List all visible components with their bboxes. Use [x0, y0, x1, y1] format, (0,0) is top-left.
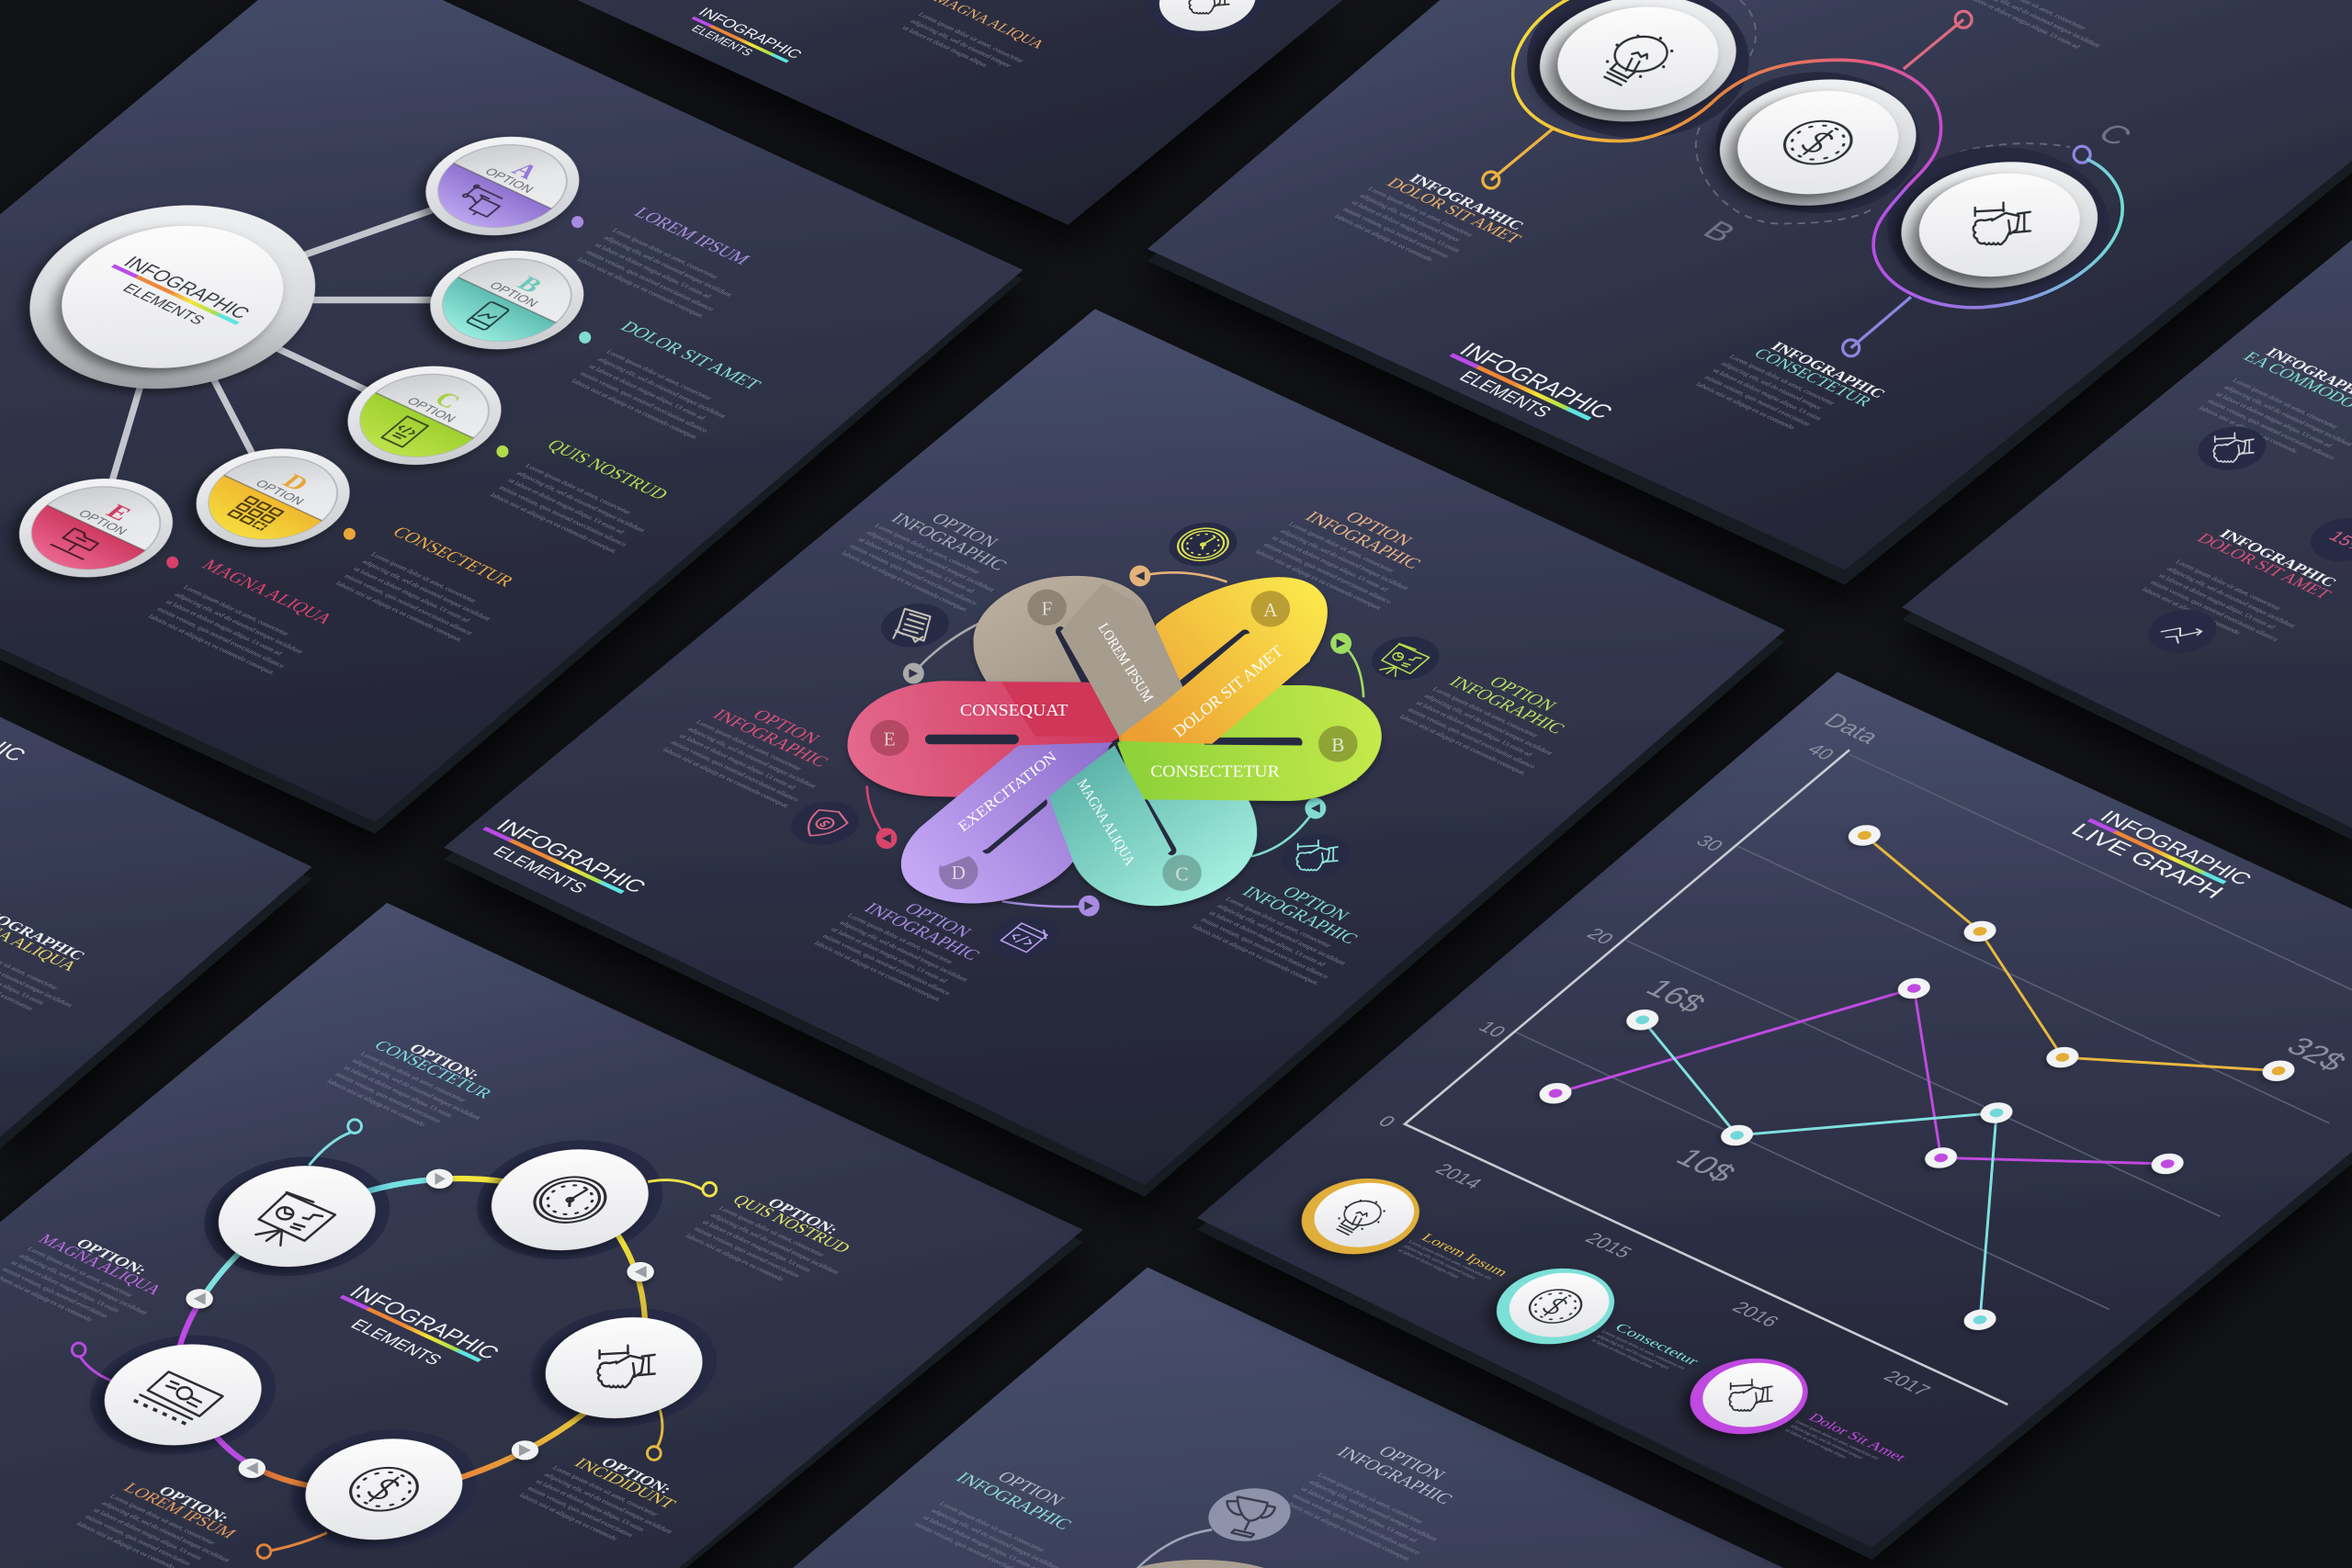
legend text: dolor sit amet: Lorem ipsum dolor sit amet, consectetur elit — [1793, 1419, 1880, 1461]
bands — [920, 583, 1358, 897]
panel: S-curve process — [1148, 0, 2352, 585]
panel: left mid sheet — [0, 682, 312, 1149]
node D: OPTION — [253, 477, 308, 507]
lorem block: ut labore et dolore magna aliqua. Ut enim ad — [2214, 390, 2335, 449]
block top right: OPTION — [1340, 509, 1417, 549]
block: magna aliqua — [0, 1224, 185, 1337]
icon: hands — [2184, 418, 2279, 479]
block: dolor sit amet — [1333, 163, 1536, 281]
petal F beige — [974, 576, 1183, 738]
chart title — [2065, 803, 2257, 907]
connector arcs — [867, 572, 1363, 907]
block bottom left: INFOGRAPHIC — [860, 900, 984, 964]
icon: hands — [1268, 826, 1363, 886]
band labels — [955, 620, 1286, 868]
block top right: laboris nisi ut aliquip ex ea commodo consequat. — [1253, 548, 1385, 612]
text B: minim veniam, quis nostrud exercitation ullamco — [578, 370, 710, 434]
text C: laboris nisi ut aliquip ex ea commodo consequat. — [489, 491, 619, 555]
legend text: lorem ipsum: adipiscing elit, sed do eiusmod tempor — [1401, 1244, 1477, 1280]
top centre lorem text: ut labore et dolore magna aliqua. — [900, 24, 990, 69]
block: lorem ipsum: OPTION: — [154, 1483, 233, 1525]
legend text: dolor sit amet: adipiscing elit, sed do eiusmod tempor — [1789, 1424, 1864, 1461]
icon: clock — [1155, 514, 1250, 575]
block top right: Lorem ipsum dolor sit amet, consectetur — [1287, 521, 1396, 574]
band labels: LOREM IPSUM — [1095, 620, 1158, 705]
icon: trophy — [1192, 1478, 1310, 1552]
text A: ut labore et dolore magna aliqua. Ut enim ad — [593, 242, 713, 299]
node B: OPTION — [486, 279, 542, 310]
block: incididunt: minim veniam, quis nostrud exercitation — [526, 1485, 636, 1539]
block: consectetur: Lorem ipsum dolor sit amet, consectetur — [358, 1050, 469, 1103]
band labels: CONSECTETUR — [1150, 762, 1280, 781]
block: consectetur: Lorem ipsum dolor sit amet, consectetur — [1727, 354, 1838, 407]
block: incididunt: Lorem ipsum dolor sit amet, consectetur — [550, 1464, 661, 1517]
node E: E — [100, 500, 137, 525]
block top left: adipiscing elit, sed do eiusmod tempor incididunt — [865, 529, 998, 593]
block: quis nostrud: minim veniam, quis nostrud exercitation — [692, 1225, 802, 1279]
block: lorem ipsum: LOREM IPSUM — [119, 1480, 240, 1541]
heading D: CONSECTETUR — [388, 524, 518, 590]
panel: bottom centre sheet — [792, 1268, 1785, 1568]
block left: OPTION — [748, 706, 824, 748]
block: dolor sit amet: DOLOR SIT AMET — [1383, 175, 1526, 247]
yellow points — [1842, 821, 2301, 1085]
block bottom right: Lorem ipsum dolor sit amet, consectetur — [1224, 896, 1334, 949]
block right: INFOGRAPHIC — [1444, 673, 1569, 737]
icon: mini chart — [2135, 602, 2231, 661]
legend: hands — [1666, 1344, 1832, 1449]
text B: ut labore et dolore magna aliqua. Ut enim ad — [587, 363, 707, 421]
heading E: MAGNA ALIQUA — [198, 557, 337, 627]
block: magna aliqua: adipiscing elit, sed do eiusmod tempor incididunt — [17, 1252, 151, 1316]
block bottom right: ut labore et dolore magna aliqua. Ut enim ad — [1207, 909, 1328, 967]
text D: laboris nisi ut aliquip ex ea commodo consequat. — [334, 580, 465, 643]
block right: adipiscing elit, sed do eiusmod tempor incididunt — [1422, 693, 1555, 757]
icon: shield — [777, 794, 873, 853]
block: consectetur: CONSECTETUR — [1749, 345, 1876, 410]
block right: Lorem ipsum dolor sit amet, consectetur — [1430, 685, 1541, 739]
value labels: 10$ — [1668, 1144, 1743, 1188]
panel: top centre sheet — [578, 0, 1342, 225]
teal line — [1643, 1020, 1996, 1320]
block top left: ut labore et dolore magna aliqua. Ut enim ad — [856, 536, 977, 594]
block right — [1397, 660, 1596, 777]
block: consectetur: minim veniam, quis nostrud exercitation — [334, 1071, 444, 1124]
block: dolor sit amet: INFOGRAPHIC — [1406, 171, 1528, 232]
central node — [0, 170, 374, 424]
block right: INFOGRAPHIC — [1332, 1444, 1456, 1507]
node C: C — [428, 388, 467, 413]
block: quis nostrud: OPTION: — [763, 1195, 842, 1237]
band labels: MAGNA ALIQUA — [1074, 776, 1139, 868]
icon: code — [977, 908, 1072, 967]
text A: adipiscing elit, sed do eiusmod tempor incididunt — [602, 234, 735, 299]
block top left: Lorem ipsum dolor sit amet, consectetur — [873, 522, 983, 575]
block top left — [840, 496, 1038, 614]
block bottom left: minim veniam, quis nostrud exercitation ullamco — [820, 932, 953, 997]
text E: minim veniam, quis nostrud exercitation ullamco — [155, 605, 288, 670]
text B: adipiscing elit, sed do eiusmod tempor incididunt — [595, 355, 729, 420]
panel: chart — [1197, 671, 2352, 1560]
text A: minim veniam, quis nostrud exercitation ullamco — [584, 249, 716, 312]
block left: ut labore et dolore magna aliqua. Ut enim ad — [678, 732, 798, 791]
badge redraws: A — [1263, 599, 1278, 621]
axis labels: 10 — [1474, 1019, 1510, 1041]
block left: INFOGRAPHIC — [952, 1470, 1076, 1533]
block: consectetur — [1694, 331, 1889, 446]
teal points — [1620, 1006, 2019, 1334]
legend text: lorem ipsum: ut labore et dolore magna aliqua — [1396, 1248, 1461, 1280]
dark disc backs — [1527, 0, 2109, 303]
block top right — [1253, 494, 1452, 613]
block: magna aliqua: Lorem ipsum dolor sit amet, consectetur — [26, 1246, 135, 1299]
legend text: consectetur: ut labore et dolore magna aliqua — [1589, 1338, 1654, 1370]
axis labels: 30 — [1691, 832, 1727, 855]
legend text: consectetur: Consectetur — [1611, 1321, 1702, 1368]
block: magna aliqua: ut labore et dolore magna aliqua. Ut enim — [9, 1259, 121, 1314]
block top right: adipiscing elit, sed do eiusmod tempor incididunt — [1279, 527, 1411, 592]
lorem block 2: Lorem ipsum dolor sit amet, consectetur — [2174, 558, 2283, 612]
block bottom left: adipiscing elit, sed do eiusmod tempor incididunt — [838, 919, 970, 983]
block bottom right: adipiscing elit, sed do eiusmod tempor incididunt — [1216, 902, 1349, 966]
axis labels: 2017 — [1879, 1368, 1935, 1399]
block: lorem ipsum: Lorem ipsum dolor sit amet, consectetur — [108, 1493, 218, 1546]
node D: D — [277, 469, 315, 496]
panel: centre flower — [444, 309, 1785, 1197]
axis labels: 40 — [1803, 741, 1838, 763]
badge redraws: B — [1331, 734, 1344, 756]
block bottom right: INFOGRAPHIC — [1238, 884, 1362, 947]
lorem right: adipiscing elit, sed do eiusmod tempor incididunt — [1307, 1479, 1441, 1542]
band labels: DOLOR SIT AMET — [1170, 641, 1286, 740]
node: coin — [274, 1419, 494, 1559]
block: dolor sit amet: Lorem ipsum dolor sit amet, consectetur — [1366, 186, 1476, 239]
block: quis nostrud: laboris nisi ut aliquip ex ea commodo — [684, 1233, 786, 1282]
lorem block: Lorem ipsum dolor sit amet, consectetur — [2231, 377, 2340, 430]
value labels: 32$ — [2278, 1032, 2352, 1077]
node A: OPTION — [481, 165, 537, 195]
text C: adipiscing elit, sed do eiusmod tempor incididunt — [514, 469, 648, 534]
petal B green — [1117, 685, 1382, 801]
icon: chart board — [1354, 627, 1456, 691]
legend text: dolor sit amet: ut labore et dolore magna aliqua — [1783, 1428, 1848, 1460]
letter B: B — [1695, 215, 1744, 248]
heading A: LOREM IPSUM — [629, 205, 753, 268]
legend text: dolor sit amet — [1783, 1408, 1910, 1477]
petal C teal: C — [1175, 863, 1189, 885]
block bottom right — [1191, 869, 1389, 987]
block: consectetur: laboris nisi ut aliquip ex ea commodo — [325, 1077, 428, 1128]
flower title: ELEMENTS — [489, 843, 591, 897]
block: consectetur — [325, 1029, 518, 1142]
text C: minim veniam, quis nostrud exercitation ullamco — [497, 484, 629, 547]
disc: hands — [1861, 138, 2138, 312]
petal E red — [847, 681, 1119, 798]
node D — [164, 430, 381, 566]
block: dolor sit amet: ut labore et dolore magna aliqua. Ut enim — [1350, 199, 1462, 254]
axis labels — [1374, 709, 1935, 1399]
bullet dots — [166, 216, 591, 569]
icon: document — [866, 595, 963, 656]
lorem block 2: adipiscing elit, sed do eiusmod tempor incididunt — [2165, 565, 2299, 629]
block: quis nostrud: QUIS NOSTRUD — [728, 1192, 854, 1257]
axis labels: 20 — [1582, 925, 1618, 948]
ring title: ELEMENTS — [346, 1316, 446, 1369]
heading block 2: DOLOR SIT AMET — [2192, 531, 2335, 603]
ring stems — [72, 1120, 717, 1558]
badge redraws — [1251, 591, 1358, 761]
block top right: ut labore et dolore magna aliqua. Ut enim ad — [1271, 535, 1391, 592]
block: consectetur: ut labore et dolore magna aliqua. Ut enim — [342, 1064, 455, 1119]
axes — [1405, 750, 2007, 1404]
title: INFOGRAPHIC — [1453, 338, 1619, 423]
block right: laboris nisi ut aliquip ex ea commodo consequat. — [1397, 713, 1529, 776]
ring title: INFOGRAPHIC — [344, 1282, 504, 1363]
disc: bulb — [1499, 0, 1776, 146]
text D: Lorem ipsum dolor sit amet, consectetur — [369, 551, 479, 604]
panel: node diagram — [0, 0, 1023, 834]
node B: B — [511, 272, 548, 298]
purple points — [1532, 974, 2190, 1179]
lorem block 2: ut labore et dolore magna aliqua. Ut enim ad — [2157, 572, 2278, 630]
block: incididunt: INCIDIDUNT — [570, 1455, 680, 1512]
top centre lorem text: Lorem ipsum dolor sit amet, consectetur — [917, 11, 1026, 64]
yellow line — [1864, 835, 2278, 1071]
node C — [316, 347, 533, 484]
node E — [0, 459, 204, 596]
block: lorem ipsum: adipiscing elit, sed do eiusmod tempor incididunt — [100, 1500, 232, 1563]
central node: INFOGRAPHIC — [119, 253, 254, 322]
block bottom left: laboris nisi ut aliquip ex ea commodo consequat. — [812, 940, 944, 1003]
letter C: C — [2090, 118, 2140, 152]
petal C teal — [1048, 745, 1257, 906]
block: incididunt: laboris nisi ut aliquip ex ea commodo — [517, 1492, 620, 1541]
node: chart — [187, 1146, 408, 1286]
block: incididunt: ut labore et dolore magna aliqua. Ut enim — [534, 1478, 647, 1533]
text E: adipiscing elit, sed do eiusmod tempor incididunt — [173, 591, 306, 655]
S curve — [1513, 0, 2122, 308]
band labels: EXERCITATION — [955, 748, 1060, 835]
block top left: laboris nisi ut aliquip ex ea commodo consequat. — [840, 549, 971, 613]
block bottom left — [812, 886, 1011, 1004]
text C: Lorem ipsum dolor sit amet, consectetur — [524, 462, 633, 515]
node: money — [73, 1325, 294, 1464]
percent disc — [2297, 510, 2352, 570]
text E: Lorem ipsum dolor sit amet, consectetur — [182, 584, 291, 637]
block: dolor sit amet: laboris nisi ut aliquip ex ea commodo — [1333, 213, 1435, 263]
node A — [394, 118, 611, 254]
text A: Lorem ipsum dolor sit amet, consectetur — [611, 227, 720, 280]
lorem block: adipiscing elit, sed do eiusmod tempor incididunt — [2222, 384, 2352, 448]
block bottom right: minim veniam, quis nostrud exercitation ullamco — [1199, 916, 1330, 980]
block: magna aliqua: OPTION: — [73, 1236, 151, 1278]
purple line — [1555, 988, 2167, 1164]
flower title: INFOGRAPHIC — [491, 816, 650, 897]
block: lorem ipsum — [74, 1471, 267, 1568]
block: incididunt: OPTION: — [597, 1455, 676, 1496]
legend text: consectetur: adipiscing elit, sed do eiusmod tempor — [1595, 1334, 1670, 1371]
band labels: CONSEQUAT — [960, 701, 1068, 719]
disc: coin — [1679, 55, 1956, 230]
value labels — [1638, 974, 2352, 1188]
block: incididunt: adipiscing elit, sed do eiusmod tempor incididunt — [542, 1472, 675, 1535]
petal D purple: D — [952, 862, 966, 884]
dashed guides — [1696, 0, 2070, 224]
block bottom right: OPTION — [1278, 884, 1353, 924]
text B: laboris nisi ut aliquip ex ea commodo consequat. — [570, 378, 701, 441]
legend text: consectetur: Lorem ipsum dolor sit amet, consectetur elit — [1600, 1330, 1686, 1371]
text D: adipiscing elit, sed do eiusmod tempor incididunt — [360, 558, 493, 622]
text D: ut labore et dolore magna aliqua. Ut enim ad — [352, 565, 472, 624]
block right: minim veniam, quis nostrud exercitation ullamco — [1406, 706, 1538, 770]
top centre title — [681, 6, 806, 73]
icon: hands disc — [1125, 0, 1291, 52]
block: dolor sit amet: minim veniam, quis nostrud exercitation — [1341, 206, 1451, 259]
title: ELEMENTS — [1454, 368, 1555, 421]
block: lorem ipsum: ut labore et dolore magna aliqua. Ut enim — [92, 1506, 204, 1562]
text C: ut labore et dolore magna aliqua. Ut enim ad — [506, 477, 627, 536]
block left: minim veniam, quis nostrud exercitation ullamco — [670, 739, 801, 803]
value labels: 16$ — [1638, 974, 1713, 1018]
node: hands — [514, 1298, 735, 1438]
legend text: lorem ipsum: Lorem Ipsum — [1418, 1231, 1511, 1279]
lorem block: minim veniam, quis nostrud exercitation ullamco — [2206, 398, 2337, 461]
block top left: minim veniam, quis nostrud exercitation ullamco — [848, 543, 979, 606]
ring segments — [177, 1179, 645, 1488]
heading B: DOLOR SIT AMET — [616, 319, 765, 393]
block: quis nostrud: Lorem ipsum dolor sit amet, consectetur — [718, 1205, 827, 1258]
lorem right: minim veniam, quis nostrud exercitation ullamco — [1291, 1493, 1422, 1556]
block: consectetur: INFOGRAPHIC — [1767, 339, 1889, 400]
lorem right: ut labore et dolore magna aliqua. Ut enim ad — [1299, 1485, 1419, 1543]
text E: ut labore et dolore magna aliqua. Ut enim ad — [164, 598, 285, 657]
beige petal tip — [1107, 1560, 1293, 1568]
block: consectetur: laboris nisi ut aliquip ex ea commodo — [1694, 381, 1797, 431]
stems — [1483, 11, 2090, 356]
block top right: INFOGRAPHIC — [1301, 509, 1425, 572]
legend text: lorem ipsum — [1396, 1229, 1511, 1292]
block bottom left: Lorem ipsum dolor sit amet, consectetur — [846, 912, 956, 965]
block: quis nostrud: adipiscing elit, sed do eiusmod tempor incididunt — [708, 1212, 842, 1276]
text B: Lorem ipsum dolor sit amet, consectetur — [605, 348, 715, 401]
petal B green: B — [1331, 734, 1344, 756]
block right: OPTION — [1485, 673, 1560, 715]
axis labels: 0 — [1374, 1112, 1399, 1131]
block: incididunt — [517, 1442, 710, 1556]
top centre lorem text: adipiscing elit, sed do eiusmod tempor — [909, 17, 1013, 69]
text D: minim veniam, quis nostrud exercitation ullamco — [343, 572, 475, 637]
block top right: minim veniam, quis nostrud exercitation ullamco — [1261, 541, 1394, 605]
block left — [662, 693, 859, 810]
block left: OPTION — [993, 1469, 1069, 1509]
block top left: OPTION — [927, 510, 1002, 551]
heading block 2: INFOGRAPHIC — [2216, 526, 2341, 590]
lorem right: Lorem ipsum dolor sit amet, consectetur — [1316, 1472, 1425, 1525]
block: consectetur: adipiscing elit, sed do eiusmod tempor — [1719, 360, 1825, 412]
text E: laboris nisi ut aliquip ex ea commodo consequat. — [146, 613, 277, 676]
block left: adipiscing elit, sed do eiusmod tempor incididunt — [686, 726, 819, 790]
ring title — [318, 1280, 504, 1383]
block right: OPTION — [1374, 1443, 1450, 1483]
panel: right sheet — [1902, 240, 2352, 840]
block bottom right: laboris nisi ut aliquip ex ea commodo consequat. — [1191, 923, 1322, 987]
ring marker arrows — [194, 1173, 647, 1474]
grid lines — [1515, 754, 2352, 1309]
block: consectetur: adipiscing elit, sed do eiusmod tempor incididunt — [350, 1057, 483, 1122]
legend text: dolor sit amet: Dolor Sit Amet — [1804, 1411, 1910, 1464]
lorem block: laboris nisi ut aliquip ex ea commodo — [2198, 404, 2300, 455]
top centre title: INFOGRAPHIC — [695, 6, 806, 62]
connectors — [112, 210, 438, 479]
block bottom left: OPTION — [899, 900, 976, 941]
petal A yellow — [1117, 577, 1328, 744]
block left: INFOGRAPHIC — [708, 706, 832, 770]
node E: OPTION — [75, 507, 130, 537]
block: quis nostrud — [684, 1183, 876, 1296]
block: consectetur: minim veniam, quis nostrud exercitation — [1702, 374, 1813, 427]
node C: OPTION — [403, 395, 459, 424]
node halos — [52, 1117, 754, 1568]
chart title: LIVE GRAPH — [2065, 820, 2229, 903]
lorem block 2: minim veniam, quis nostrud exercitation ullamco — [2149, 579, 2280, 643]
lorem right: laboris nisi ut aliquip ex ea commodo consequat. — [1283, 1499, 1413, 1562]
block top left: INFOGRAPHIC — [887, 510, 1011, 573]
legend: coin — [1473, 1254, 1638, 1359]
connector arc — [1137, 1529, 1212, 1568]
heading C: QUIS NOSTRUD — [542, 437, 673, 502]
block right: ut labore et dolore magna aliqua. Ut enim ad — [1414, 699, 1534, 758]
connector markers — [876, 566, 1351, 917]
legend: bulb — [1278, 1164, 1443, 1269]
central node: ELEMENTS — [119, 280, 209, 328]
petal F beige: F — [1042, 597, 1053, 619]
petal E red: E — [884, 728, 896, 750]
axis labels: Data — [1818, 709, 1886, 748]
block: consectetur: OPTION: — [405, 1041, 484, 1082]
block left: laboris nisi ut aliquip ex ea commodo consequat. — [662, 746, 792, 809]
petal A yellow: A — [1263, 599, 1278, 621]
chart title: INFOGRAPHIC — [2095, 807, 2257, 889]
block: consectetur: CONSECTETUR — [369, 1038, 496, 1102]
block left: Lorem ipsum dolor sit amet, consectetur — [695, 718, 804, 772]
block: dolor sit amet: adipiscing elit, sed do eiusmod tempor — [1358, 192, 1463, 243]
legend text: lorem ipsum: Lorem ipsum dolor sit amet, consectetur elit — [1407, 1240, 1493, 1281]
block: magna aliqua: MAGNA ALIQUA — [34, 1232, 166, 1298]
ring markers — [186, 1169, 654, 1478]
block bottom left: ut labore et dolore magna aliqua. Ut enim ad — [830, 926, 950, 984]
axis labels: 2015 — [1580, 1230, 1636, 1261]
panel: bottom left ring diagram — [0, 903, 1083, 1568]
block: lorem ipsum: minim veniam, quis nostrud exercitation — [84, 1514, 193, 1567]
petal D purple — [901, 741, 1113, 904]
node: clock — [459, 1130, 681, 1269]
block: magna aliqua: minim veniam, quis nostrud exercitation — [1, 1266, 110, 1319]
text A: laboris nisi ut aliquip ex ea commodo consequat. — [575, 256, 707, 319]
node A: A — [506, 158, 545, 184]
node B — [399, 231, 615, 368]
lorem left: Lorem ipsum dolor sit amet, consectetur — [938, 1500, 1047, 1553]
block: consectetur: ut labore et dolore magna aliqua. Ut enim — [1711, 367, 1824, 422]
legend text: consectetur — [1589, 1319, 1702, 1382]
axis labels: 2016 — [1727, 1299, 1783, 1330]
axis labels: 2014 — [1430, 1161, 1487, 1192]
top centre title: ELEMENTS — [688, 23, 756, 58]
lorem block 2: laboris nisi ut aliquip ex ea commodo — [2141, 586, 2243, 636]
block: quis nostrud: ut labore et dolore magna aliqua. Ut enim — [700, 1219, 813, 1273]
flower title — [464, 813, 650, 914]
